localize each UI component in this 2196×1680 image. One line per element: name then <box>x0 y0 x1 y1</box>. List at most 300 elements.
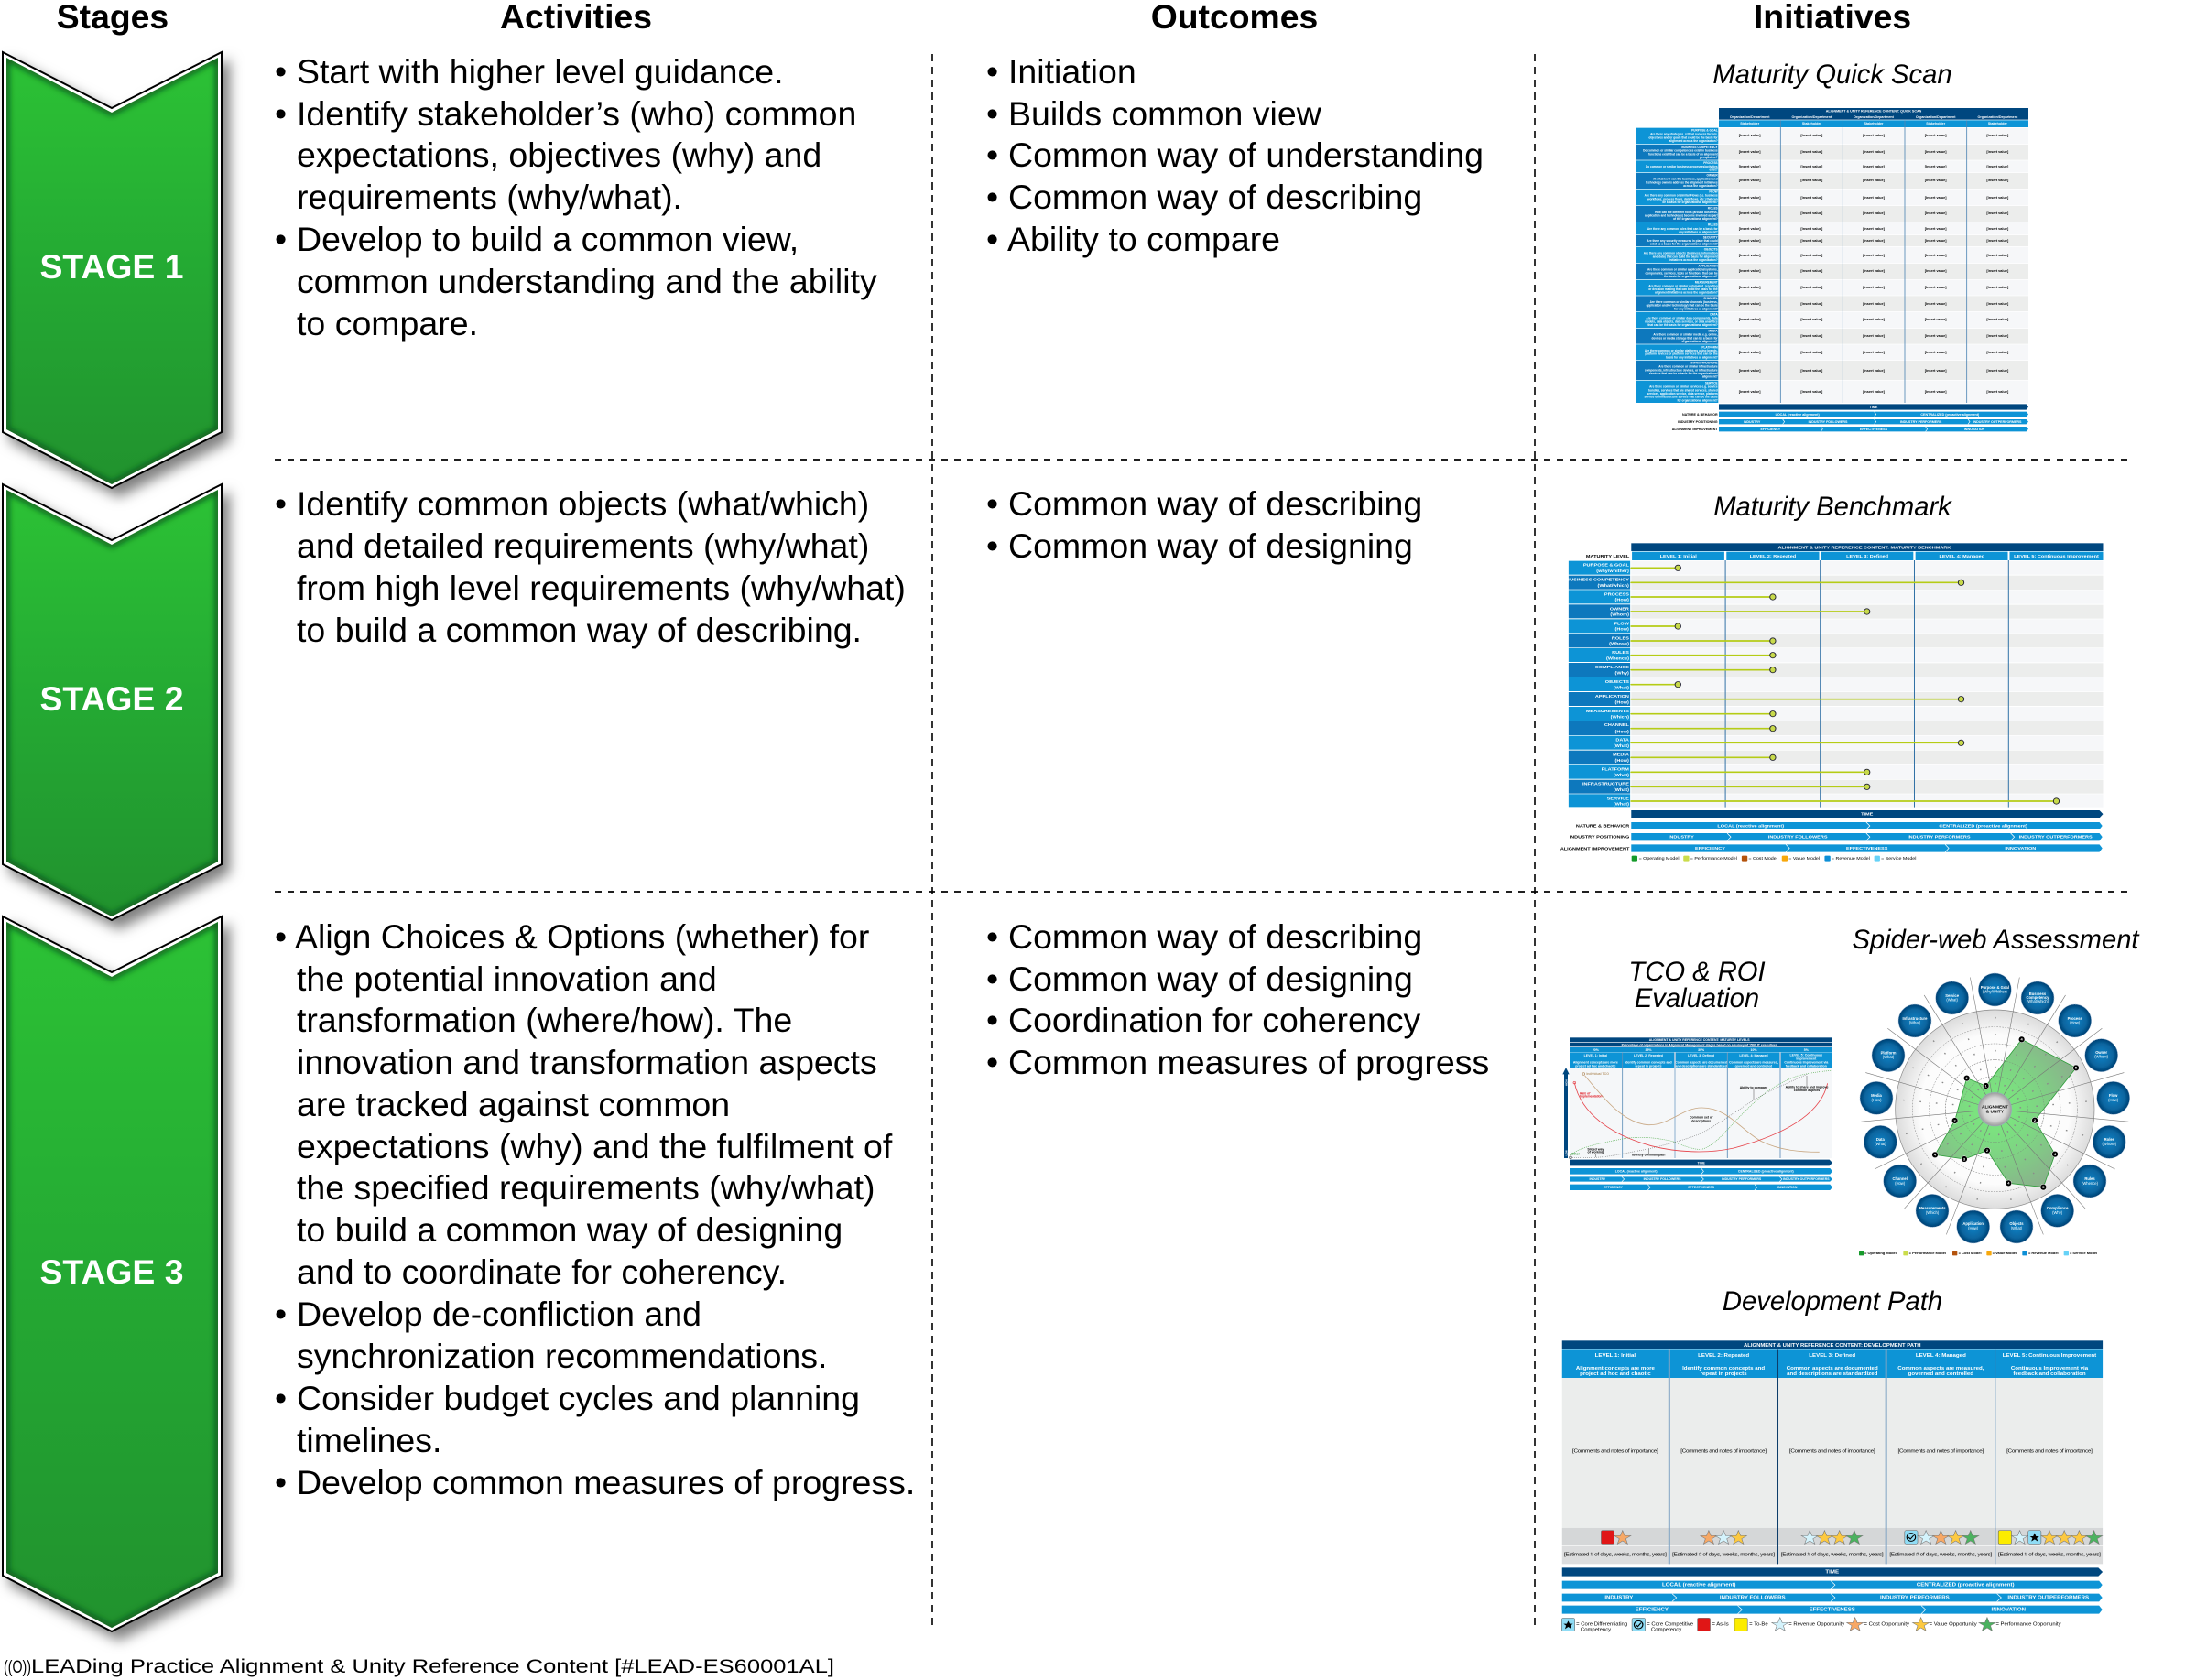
outcomes: stage 2: Common way of describing <box>1008 484 1422 523</box>
thumbnail: maturity quick scan table: [Insert value] <box>1925 334 1947 338</box>
thumbnail: maturity quick scan table: [Insert value] <box>1800 318 1823 321</box>
outcomes: stage 1: • <box>986 94 998 133</box>
activities: stage 3: to build a common way of designing <box>297 1210 843 1249</box>
spider category bubbles: (Whom) <box>2094 1054 2109 1058</box>
thumbnail: development path table: feedback and collaboration <box>2013 1371 2086 1377</box>
thumbnail: maturity quick scan table: Stakeholder <box>1864 122 1884 125</box>
thumbnail: maturity quick scan table: TIME <box>1870 406 1878 409</box>
activities: stage 2: Identify common objects (what/which) <box>297 484 869 523</box>
thumbnail: maturity quick scan table: [Insert value] <box>1986 211 2009 215</box>
thumbnail: maturity quick scan table: SECURITY <box>1703 236 1719 240</box>
activities: stage 1 <box>275 52 877 342</box>
thumbnail: TCO and ROI evaluation chart: TIME <box>1698 1161 1706 1165</box>
thumbnail: maturity quick scan table: EFFICIENCY <box>1760 428 1781 431</box>
outcomes: stage 1: Ability to compare <box>1007 220 1280 258</box>
spider legend: = Cost Model <box>1959 1251 1982 1255</box>
thumbnail: TCO and ROI evaluation chart: EFFICIENCY <box>1604 1186 1624 1189</box>
activities: stage 3: Consider budget cycles and planning <box>297 1379 860 1417</box>
thumbnail: maturity quick scan table: [Insert value] <box>1739 211 1761 215</box>
activities: stage 3: • <box>275 1463 287 1501</box>
thumbnail: TCO and ROI evaluation chart: EFFECTIVENESS <box>1688 1186 1715 1189</box>
outcomes: stage 3: • <box>986 1043 998 1081</box>
thumbnail: maturity quick scan table: across the organization? <box>1683 184 1718 188</box>
thumbnail: maturity quick scan table: OWNER <box>1707 174 1718 178</box>
thumbnail: TCO and ROI evaluation chart: HIGH <box>1564 1079 1568 1086</box>
thumbnail: maturity quick scan table: Are there any common or similar Flows (i.e. business <box>1645 194 1718 198</box>
thumbnail: TCO and ROI evaluation chart: project ad hoc and chaotic <box>1575 1064 1615 1068</box>
activities: stage 1: requirements (why/what). <box>297 178 682 216</box>
thumbnail: maturity quick scan table: [Insert value] <box>1863 369 1886 373</box>
thumbnail: maturity benchmark chart <box>1560 543 2103 862</box>
thumbnail: development path table: LEVEL 4: Managed <box>1916 1353 1966 1359</box>
thumbnail: maturity benchmark chart: CENTRALIZED (proactive alignment) <box>1939 824 2027 829</box>
thumbnail: maturity quick scan table: Are there common or similar platforms using brands, <box>1645 349 1718 352</box>
thumbnail: TCO and ROI evaluation chart: Continuous Improvement via <box>1784 1061 1828 1065</box>
activities: stage 2: • <box>275 484 287 523</box>
outcomes: stage 3: • <box>986 917 998 956</box>
thumbnail: maturity quick scan table: [Insert value] <box>1739 286 1761 289</box>
thumbnail: maturity quick scan table: [Insert value] <box>1800 390 1823 394</box>
thumbnail: maturity quick scan table: [Insert value] <box>1863 334 1886 338</box>
outcomes: stage 3: • <box>986 959 998 998</box>
thumbnail: maturity quick scan table: [Insert value] <box>1863 318 1886 321</box>
thumbnail: maturity quick scan table: Stakeholder <box>1926 122 1946 125</box>
thumbnail: maturity quick scan table: bundles, services that are shared services, shared <box>1648 388 1718 392</box>
thumbnail: TCO and ROI evaluation chart: INDUSTRY PERFORMERS <box>1722 1177 1762 1181</box>
activities: stage 3: timelines. <box>297 1421 441 1459</box>
activities: stage 1: • <box>275 52 287 91</box>
outcomes: stage 1: Common way of describing <box>1008 178 1422 216</box>
thumbnail: development path table <box>1561 1340 2103 1632</box>
thumbnail: maturity quick scan table: How can the different roles (around business, <box>1655 211 1718 214</box>
thumbnail: development path table: INDUSTRY <box>1604 1596 1634 1600</box>
thumbnail: maturity quick scan table: Stakeholder <box>1988 122 2007 125</box>
thumbnail: development path table: Alignment concepts are more <box>1576 1366 1655 1371</box>
thumbnail: development path table: governed and controlled <box>1908 1371 1974 1377</box>
thumbnail: maturity benchmark chart: PROCESS <box>1604 592 1630 597</box>
thumbnail: maturity benchmark chart: SERVICE <box>1607 797 1630 801</box>
thumbnail: maturity quick scan table: Stakeholder <box>1740 122 1760 125</box>
thumbnail: maturity quick scan table: APPLICATION <box>1698 265 1718 268</box>
thumbnail: TCO and ROI evaluation chart: Siloed way <box>1587 1147 1604 1151</box>
thumbnail: maturity benchmark chart: BUSINESS COMPETENCY <box>1566 578 1630 582</box>
thumbnail: maturity quick scan table: [Insert value] <box>1925 254 1947 257</box>
thumbnail: development path table: EFFICIENCY <box>1636 1608 1669 1612</box>
thumbnail: TCO and ROI evaluation chart: LEVEL 3: Defined <box>1688 1054 1714 1057</box>
activities: stage 3: • <box>275 917 287 956</box>
thumbnail: maturity quick scan table: Are there any common rules that can be a basis for <box>1647 227 1718 231</box>
thumbnail: TCO and ROI evaluation chart: INDUSTRY <box>1589 1177 1606 1181</box>
spider category bubbles: (What) <box>1946 997 1959 1002</box>
thumbnail: maturity benchmark chart: (What) <box>1614 802 1629 807</box>
thumbnail: maturity quick scan table: [Insert value] <box>1800 196 1823 200</box>
development path legend: = Cost Opportunity <box>1864 1622 1909 1627</box>
spider category bubbles: (What) <box>2011 1226 2023 1230</box>
spider category bubbles: (What) <box>1909 1020 1921 1024</box>
initiative title: Maturity Quick Scan: Maturity Quick Scan <box>1712 60 1952 90</box>
thumbnail: maturity quick scan table: [Insert value] <box>1986 269 2009 273</box>
thumbnail: maturity quick scan table: services, application service, data service, platform <box>1647 392 1718 396</box>
thumbnail: maturity quick scan table: [Insert value] <box>1739 351 1761 354</box>
thumbnail: maturity quick scan table: models, data objects, data services, or data analytics <box>1645 320 1718 323</box>
thumbnail: TCO and ROI evaluation chart <box>1562 1037 1832 1190</box>
thumbnail: maturity quick scan table: Organization/Department <box>1730 115 1770 119</box>
spider score markers: 5 <box>2042 1185 2045 1189</box>
thumbnail: maturity quick scan table: perspective? <box>1700 156 1718 159</box>
outcomes: stage 3 <box>986 917 1489 1081</box>
thumbnail: maturity quick scan table: [Insert value] <box>1925 302 1947 306</box>
thumbnail: TCO and ROI evaluation chart: ALIGNMENT & UNITY REFERENCE CONTENT: MATURITY LEVELS <box>1649 1038 1750 1042</box>
thumbnail: maturity quick scan table: [Insert value] <box>1863 227 1886 231</box>
thumbnail: maturity quick scan table: INDUSTRY OUTPERFORMERS <box>1973 420 2022 424</box>
thumbnail: maturity quick scan table: INDUSTRY <box>1744 420 1761 424</box>
spider category bubbles: (How) <box>2070 1020 2081 1024</box>
spider category bubbles: (Why) <box>2052 1210 2063 1215</box>
thumbnail: maturity benchmark chart: OWNER <box>1610 607 1629 612</box>
thumbnail: maturity quick scan table: [Insert value] <box>1800 227 1823 231</box>
thumbnail: maturity quick scan table: Are there common or similar applications/systems, <box>1647 268 1718 272</box>
thumbnail: maturity quick scan table: MEDIA <box>1708 330 1718 333</box>
thumbnail: maturity quick scan table: exist? <box>1710 168 1718 172</box>
thumbnail: maturity quick scan table: [Insert value] <box>1800 334 1823 338</box>
thumbnail: maturity quick scan table: [Insert value] <box>1739 254 1761 257</box>
thumbnail: maturity benchmark chart: ALIGNMENT IMPROVEMENT <box>1560 847 1630 851</box>
activities: stage 3: the specified requirements (why/what) <box>297 1168 875 1207</box>
thumbnail: TCO and ROI evaluation chart: descriptions <box>1691 1120 1711 1123</box>
outcomes: stage 1: • <box>986 178 998 216</box>
thumbnail: maturity benchmark chart: PURPOSE & GOAL <box>1583 563 1629 568</box>
thumbnail: maturity quick scan table: [Insert value] <box>1986 254 2009 257</box>
thumbnail: maturity quick scan table: Are there common or similar data components, data <box>1646 317 1718 320</box>
spider legend: = Value Model <box>1993 1251 2017 1255</box>
thumbnail: maturity benchmark chart: = Cost Model <box>1748 856 1777 862</box>
activities: stage 3: the potential innovation and <box>297 959 717 998</box>
thumbnail: maturity quick scan table: [Insert value] <box>1863 254 1886 257</box>
thumbnail: maturity quick scan table: [Insert value] <box>1800 211 1823 215</box>
thumbnail: maturity quick scan table: [Insert value] <box>1800 369 1823 373</box>
thumbnail: maturity quick scan table: [Insert value] <box>1925 196 1947 200</box>
spider category bubbles: Application <box>1962 1221 1984 1226</box>
thumbnail: development path table: [Comments and notes of importance] <box>1680 1449 1767 1454</box>
spider category bubbles: (Whence) <box>2082 1181 2099 1186</box>
thumbnail: maturity benchmark chart: CHANNEL <box>1604 722 1629 728</box>
thumbnail: maturity quick scan table: PURPOSE & GOAL <box>1691 129 1718 133</box>
spider category bubbles: (How) <box>1871 1098 1882 1102</box>
thumbnail: maturity benchmark chart: EFFECTIVENESS <box>1846 846 1888 851</box>
thumbnail: maturity quick scan table: Are there common or similar automated, reporting <box>1648 284 1718 287</box>
thumbnail: development path table: Continuous Improvement via <box>2011 1366 2089 1371</box>
thumbnail: maturity quick scan table: [Insert value] <box>1863 269 1886 273</box>
activities: stage 2 <box>275 484 906 649</box>
thumbnail: TCO and ROI evaluation chart: governed and controlled <box>1735 1064 1772 1068</box>
thumbnail: development path table: [Estimated # of days, weeks, months, years] <box>1564 1553 1667 1557</box>
thumbnail: maturity quick scan table: services that can be a basis for the organizational <box>1649 372 1718 375</box>
thumbnail: maturity quick scan table: [Insert value] <box>1800 165 1823 168</box>
outcomes: stage 1: • <box>986 220 998 258</box>
thumbnail: maturity quick scan table: [Insert value] <box>1739 302 1761 306</box>
activities: stage 3: expectations (why) and the fulfilment of <box>297 1127 893 1165</box>
thumbnail: development path table: LEVEL 5: Continuous Improvement <box>2003 1353 2096 1359</box>
thumbnail: maturity quick scan table: exist as a basis for the organizational alignment? <box>1650 243 1718 246</box>
development path legend: Competency <box>1581 1628 1611 1632</box>
thumbnail: maturity quick scan table: DATA <box>1710 313 1718 317</box>
thumbnail: maturity quick scan table: Do common or similar business processes/activities <box>1646 165 1718 168</box>
thumbnail: maturity quick scan table: [Insert value] <box>1800 351 1823 354</box>
thumbnail: TCO and ROI evaluation chart: and descriptions are standardized <box>1675 1064 1727 1068</box>
activities: stage 1: Start with higher level guidance. <box>297 52 784 91</box>
thumbnail: TCO and ROI evaluation chart: LOCAL (reactive alignment) <box>1615 1169 1658 1173</box>
thumbnail: TCO and ROI evaluation chart: LEVEL 2: Repeated <box>1634 1054 1663 1057</box>
thumbnail: development path table: EFFECTIVENESS <box>1810 1608 1855 1612</box>
outcomes: stage 1: Builds common view <box>1008 94 1322 133</box>
thumbnail: maturity quick scan table: alignment across the organization? <box>1669 139 1718 143</box>
thumbnail: maturity quick scan table: platform devices or platform services that can be the <box>1645 352 1718 356</box>
thumbnail: maturity quick scan table: [Insert value] <box>1863 390 1886 394</box>
thumbnail: maturity quick scan table: [Insert value] <box>1863 239 1886 243</box>
thumbnail: maturity quick scan table: initiatives across the organization? <box>1669 258 1718 262</box>
thumbnail: maturity quick scan table: INNOVATION <box>1964 428 1985 431</box>
spider hub: ALIGNMENT <box>1982 1105 2008 1111</box>
thumbnail: maturity benchmark chart: LOCAL (reactive alignment) <box>1717 824 1784 829</box>
thumbnail: TCO and ROI evaluation chart: Common aspects are measured, <box>1729 1061 1778 1065</box>
thumbnail: TCO and ROI evaluation chart: CENTRALIZED (proactive alignment) <box>1738 1169 1794 1173</box>
thumbnail: TCO and ROI evaluation chart: LEVEL 1: Initial <box>1584 1054 1607 1057</box>
thumbnail: maturity benchmark chart: (How) <box>1615 627 1629 632</box>
thumbnail: TCO and ROI evaluation chart: Alignment concepts are more <box>1573 1061 1618 1065</box>
activities: stage 3: • <box>275 1379 287 1417</box>
spider legend: = Revenue Model <box>2028 1251 2059 1255</box>
thumbnail: TCO and ROI evaluation chart: INDUSTRY FOLLOWERS <box>1644 1177 1681 1181</box>
outcomes: stage 1: Common way of understanding <box>1008 135 1484 174</box>
outcomes: stage 2: Common way of designing <box>1008 526 1413 565</box>
thumbnail: maturity quick scan table: [Insert value] <box>1925 134 1947 137</box>
thumbnail: maturity quick scan table: At what level can the business, application and <box>1653 178 1718 181</box>
spider category bubbles: (How) <box>2108 1098 2119 1102</box>
thumbnail: development path table: [Estimated # of days, weeks, months, years] <box>1889 1553 1993 1557</box>
thumbnail: TCO and ROI evaluation chart: Improvement <box>1796 1057 1817 1060</box>
thumbnail: TCO and ROI evaluation chart: INNOVATION <box>1777 1186 1798 1189</box>
initiative title: TCO & ROI Evaluation: TCO & ROI <box>1628 958 1766 987</box>
stage 2 chevron <box>3 484 222 920</box>
thumbnail: TCO and ROI evaluation chart: Identify common concepts and <box>1625 1061 1672 1065</box>
thumbnail: TCO and ROI evaluation chart: 10% <box>1751 1048 1756 1052</box>
spider category bubbles: Process <box>2068 1016 2082 1021</box>
outcomes: stage 3: Common measures of progress <box>1008 1043 1489 1081</box>
footer: source line: LEADing Practice Alignment & Unity Reference Content [#LEAD-ES60001AL] <box>31 1656 834 1677</box>
spider category bubbles: Objects <box>2009 1221 2024 1226</box>
thumbnail: development path table: CENTRALIZED (proactive alignment) <box>1917 1583 2015 1588</box>
thumbnail: maturity quick scan table: for any initiatives of alignment? <box>1674 307 1718 310</box>
thumbnail: maturity quick scan table: SERVICE <box>1705 382 1718 385</box>
thumbnail: maturity quick scan table: alignment? <box>1702 375 1718 379</box>
thumbnail: maturity quick scan table: the basis for organizational alignment? <box>1664 275 1718 278</box>
spider category bubbles: Infrastructure <box>1902 1016 1928 1021</box>
thumbnail: maturity quick scan table: [Insert value] <box>1925 150 1947 154</box>
thumbnail: maturity quick scan table: [Insert value] <box>1925 269 1947 273</box>
thumbnail: maturity benchmark chart: EFFICIENCY <box>1695 846 1726 851</box>
thumbnail: TCO and ROI evaluation chart: Other <box>1571 1152 1581 1155</box>
thumbnail: maturity quick scan table: Stakeholder <box>1802 122 1821 125</box>
thumbnail: maturity benchmark chart: (Whose) <box>1609 642 1629 646</box>
thumbnail: maturity quick scan table: NATURE & BEHAVIOR <box>1682 413 1718 417</box>
thumbnail: maturity benchmark chart: LEVEL 2: Repeated <box>1750 554 1796 559</box>
spider category bubbles: Channel <box>1892 1176 1908 1181</box>
thumbnail: maturity benchmark chart: = Revenue Model <box>1832 856 1870 862</box>
thumbnail: maturity quick scan table: INFRASTRUCTURE <box>1691 362 1718 365</box>
thumbnail: maturity benchmark chart: (Why) <box>1615 671 1629 676</box>
development path legend: = Revenue Opportunity <box>1788 1622 1845 1627</box>
thumbnail: maturity quick scan table: [Insert value] <box>1863 302 1886 306</box>
thumbnail: maturity benchmark chart: (Whom) <box>1610 612 1629 617</box>
thumbnail: maturity quick scan table: [Insert value] <box>1986 227 2009 231</box>
outcomes: stage 3: • <box>986 1001 998 1039</box>
spider category bubbles <box>1860 973 2130 1243</box>
development path legend: Competency <box>1651 1628 1682 1632</box>
thumbnail: maturity quick scan table: Are there any security measures in place that could <box>1647 239 1718 243</box>
thumbnail: maturity quick scan table: and data) that can build the basis for alignment <box>1653 255 1719 258</box>
spider category bubbles: Media <box>1871 1093 1883 1098</box>
spider score markers: 2 <box>1954 1118 1957 1122</box>
thumbnail: maturity quick scan table: Organization/Department <box>1854 115 1895 119</box>
activities: stage 1: Develop to build a common view, <box>297 220 799 258</box>
spider category bubbles: Purpose & Goal <box>1981 985 2009 990</box>
thumbnail: maturity quick scan table: [Insert value] <box>1739 134 1761 137</box>
thumbnail: TCO and ROI evaluation chart: Percentage of organizations in Alignment Management stages based on a survey of 1500 IT executives <box>1622 1043 1777 1046</box>
outcomes: stage 1: Initiation <box>1008 52 1136 91</box>
thumbnail: maturity quick scan table: RULES <box>1708 223 1718 227</box>
activities: stage 3: Develop common measures of progress. <box>297 1463 915 1501</box>
thumbnail: maturity benchmark chart: INFRASTRUCTURE <box>1582 782 1630 786</box>
thumbnail: development path table: TIME <box>1825 1570 1839 1575</box>
thumbnail: development path table: Common aspects are measured, <box>1897 1366 1984 1371</box>
thumbnail: maturity benchmark chart: LEVEL 1: Initial <box>1660 554 1697 559</box>
thumbnail: development path table: Common aspects are documented <box>1787 1366 1878 1371</box>
thumbnail: maturity quick scan table: Are there any strategies, critical success factors, <box>1650 133 1718 136</box>
thumbnail: maturity benchmark chart: (Whence) <box>1606 656 1629 661</box>
spider hub: & UNITY <box>1986 1110 2005 1115</box>
thumbnail: maturity quick scan table: [Insert value] <box>1800 286 1823 289</box>
thumbnail: maturity quick scan table: Are there common or similar channels (business, <box>1650 300 1718 304</box>
thumbnail: TCO and ROI evaluation chart: Ability to compare <box>1740 1086 1767 1089</box>
thumbnail: maturity quick scan table: alignment initiatives across the organization? <box>1655 291 1718 295</box>
thumbnail: development path table: [Estimated # of days, weeks, months, years] <box>1998 1553 2101 1557</box>
thumbnail: development path table: [Comments and notes of importance] <box>1897 1449 1984 1454</box>
thumbnail: maturity quick scan table: [Insert value] <box>1863 351 1886 354</box>
spider score markers: 2 <box>1986 1148 1989 1153</box>
thumbnail: maturity quick scan table: [Insert value] <box>1739 165 1761 168</box>
spider category bubbles: (How) <box>1968 1226 1979 1230</box>
thumbnail: maturity quick scan table: devices or media storage that can be a basis for <box>1652 336 1718 340</box>
thumbnail: maturity quick scan table: functions exist that can be a basis of an alignment <box>1648 152 1719 156</box>
thumbnail: TCO and ROI evaluation chart: LEVEL 4: Managed <box>1739 1054 1768 1057</box>
thumbnail: maturity quick scan table: [Insert value] <box>1986 179 2009 182</box>
development path legend: = As-Is <box>1712 1622 1729 1627</box>
outcomes: stage 2: • <box>986 484 998 523</box>
thumbnail: TCO and ROI evaluation chart: 5% <box>1804 1048 1809 1052</box>
thumbnail: maturity benchmark chart: LEVEL 3: Defined <box>1846 554 1888 559</box>
thumbnail: development path table: [Comments and notes of importance] <box>2006 1449 2093 1454</box>
thumbnail: maturity quick scan table: LOCAL (reactive alignment) <box>1776 413 1820 417</box>
thumbnail: maturity benchmark chart: APPLICATION <box>1595 694 1629 699</box>
thumbnail: TCO and ROI evaluation chart: Common set of <box>1690 1116 1713 1120</box>
thumbnail: maturity benchmark chart: LEVEL 5: Continuous Improvement <box>2014 554 2099 559</box>
thumbnail: maturity quick scan table: [Insert value] <box>1986 165 2009 168</box>
initiative title: Maturity Benchmark: Maturity Benchmark <box>1713 493 1952 522</box>
outcomes: stage 1: • <box>986 135 998 174</box>
spider score markers: 3 <box>1963 1156 1966 1161</box>
thumbnail: development path table: Identify common concepts and <box>1682 1366 1766 1371</box>
outcomes: stage 3: Common way of describing <box>1008 917 1422 956</box>
spider score markers: 4 <box>1934 1153 1937 1157</box>
stage 3 chevron: STAGE 3 <box>40 1252 183 1291</box>
spider category bubbles: Owner <box>2095 1050 2108 1055</box>
thumbnail: maturity quick scan table: [Insert value] <box>1925 390 1947 394</box>
thumbnail: TCO and ROI evaluation chart: Common aspects are documented <box>1675 1061 1727 1065</box>
activities: stage 3: and to coordinate for coherency. <box>297 1252 787 1291</box>
thumbnail: maturity quick scan table: Are there common or similar infrastructure <box>1658 365 1718 369</box>
thumbnail: maturity benchmark chart: (How) <box>1615 700 1629 705</box>
thumbnail: maturity benchmark chart: = Value Model <box>1788 856 1820 862</box>
thumbnail: maturity quick scan table <box>1636 108 2028 431</box>
thumbnail: maturity quick scan table: [Insert value] <box>1800 134 1823 137</box>
thumbnail: maturity quick scan table: any initiatives of alignment? <box>1679 230 1718 233</box>
thumbnail: TCO and ROI evaluation chart: 35% <box>1646 1048 1651 1052</box>
thumbnail: maturity quick scan table: basis for any initiatives of alignment? <box>1666 355 1718 359</box>
activities: stage 3: Align Choices & Options (whether) for <box>295 917 869 956</box>
thumbnail: development path table: LOCAL (reactive alignment) <box>1662 1583 1736 1588</box>
outcomes: stage 2: • <box>986 526 998 565</box>
thumbnail: maturity quick scan table: [Insert value] <box>1925 227 1947 231</box>
thumbnail: maturity quick scan table: for organizational alignment? <box>1677 398 1718 402</box>
thumbnail: maturity quick scan table: [Insert value] <box>1986 196 2009 200</box>
thumbnail: maturity quick scan table: [Insert value] <box>1739 369 1761 373</box>
spider score markers: 4 <box>2021 1037 2024 1042</box>
thumbnail: TCO and ROI evaluation chart: 20% <box>1593 1048 1599 1052</box>
thumbnail: maturity quick scan table: BUSINESS COMPETENCY <box>1681 146 1719 149</box>
thumbnail: maturity benchmark chart: (How) <box>1615 730 1629 734</box>
thumbnail: maturity quick scan table: [Insert value] <box>1739 269 1761 273</box>
thumbnail: maturity quick scan table: [Insert value] <box>1925 179 1947 182</box>
activities: stage 2: and detailed requirements (why/what) <box>297 526 869 565</box>
spider category bubbles: Platform <box>1881 1051 1897 1056</box>
thumbnail: development path table: INNOVATION <box>1992 1608 2026 1612</box>
thumbnail: maturity benchmark chart: MEDIA <box>1613 753 1629 757</box>
development path legend <box>1561 1618 2061 1632</box>
thumbnail: development path table: LEVEL 2: Repeated <box>1698 1353 1750 1359</box>
activities: stage 3: are tracked against common <box>297 1085 730 1123</box>
thumbnail: maturity quick scan table: or decision making that can build the basis for the <box>1648 287 1718 291</box>
spider disc and rings <box>1896 1010 2094 1209</box>
outcomes: stage 3: Coordination for coherency <box>1008 1001 1421 1039</box>
thumbnail: maturity benchmark chart: INDUSTRY OUTPERFORMERS <box>2019 835 2093 840</box>
thumbnail: maturity quick scan table: [Insert value] <box>1925 239 1947 243</box>
spider score markers <box>1932 1036 2079 1190</box>
thumbnail: maturity benchmark chart: ROLES <box>1612 636 1630 641</box>
thumbnail: maturity quick scan table: components, services, tools or functions that can be <box>1646 271 1718 275</box>
spider score markers: 4 <box>2007 1181 2010 1186</box>
development path legend: = Core Competitive <box>1647 1622 1693 1627</box>
thumbnail: maturity quick scan table: [Insert value] <box>1986 351 2009 354</box>
thumbnail: maturity benchmark chart: PLATFORM <box>1602 767 1629 772</box>
thumbnail: maturity quick scan table: ALIGNMENT IMPROVEMENT <box>1672 428 1718 431</box>
activities: stage 3: innovation and transformation aspects <box>297 1043 877 1081</box>
thumbnail: maturity quick scan table: [Insert value] <box>1739 150 1761 154</box>
activities: stage 1: to compare. <box>297 304 478 342</box>
outcomes: stage 3: Common way of designing <box>1008 959 1413 998</box>
thumbnail: maturity quick scan table: ALIGNMENT & UNITY REFERENCE CONTENT: QUICK SCAN <box>1826 109 1922 113</box>
spider score markers: 2 <box>1966 1076 1969 1080</box>
thumbnail: TCO and ROI evaluation chart: 30% <box>1698 1048 1704 1052</box>
